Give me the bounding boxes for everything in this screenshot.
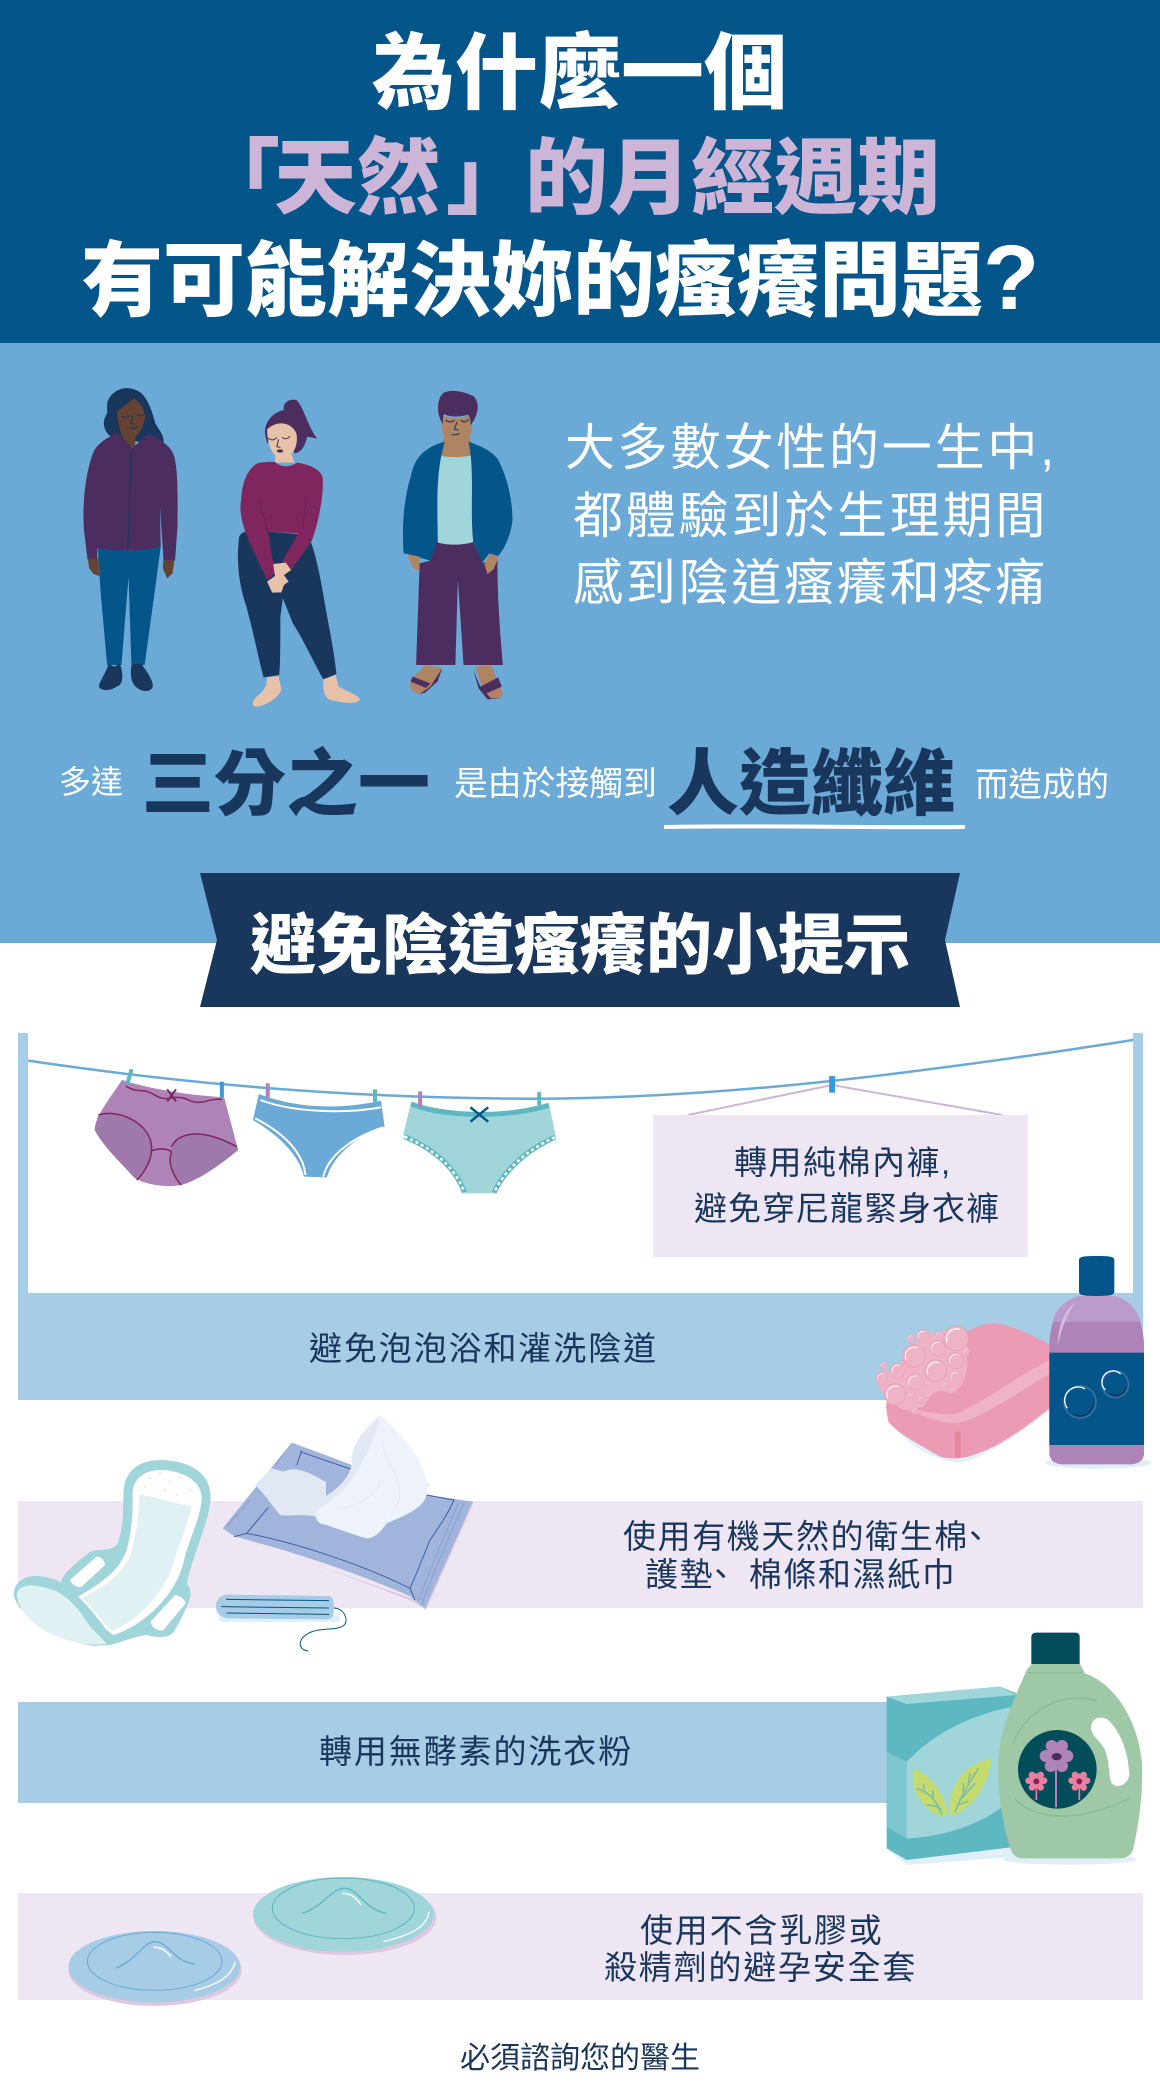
statistic line: 而造成的 [975, 767, 1109, 804]
tip 3 text: 使用有機天然的衛生棉、 [623, 1518, 994, 1555]
icon: wipes packet [223, 1415, 474, 1610]
tip 1 sign: 避免穿尼龍緊身衣褲 [694, 1190, 1000, 1227]
statistic line: 是由於接觸到 [454, 765, 657, 803]
footer note: 必須諮詢您的醫生 [460, 2042, 700, 2075]
tip 3 text: 護墊、 棉條和濕紙巾 [645, 1556, 956, 1593]
banner: tips heading [200, 873, 960, 1007]
title [81, 27, 1039, 329]
intro panel [0, 343, 1160, 943]
tip 5 band [18, 1893, 1143, 2000]
tip 2 band [18, 1293, 1143, 1400]
icon: purple wash bottle [1045, 1256, 1152, 1469]
intro statement: 感到陰道瘙癢和疼痛 [573, 555, 1048, 611]
title: 的月經週期 [525, 132, 940, 225]
intro statement: 大多數女性的一生中, [565, 420, 1057, 476]
tip 1 sign [653, 1115, 1028, 1257]
tip 4 band [18, 1702, 898, 1803]
icon: blue underwear [253, 1094, 385, 1177]
title: 」 [446, 132, 529, 225]
icon: condom blue [68, 1931, 242, 2006]
clothesline posts [18, 1033, 1143, 1300]
tip 5 text: 使用不含乳膠或 [640, 1912, 884, 1949]
header panel [0, 0, 1160, 343]
icon: detergent bottle [998, 1633, 1142, 1865]
intro statement [565, 420, 1057, 611]
title: 「 [197, 132, 280, 225]
person: man in cardigan [403, 391, 512, 699]
banner: tips heading: 避免陰道瘙癢的小提示 [250, 908, 910, 982]
icon: soap with bubbles [876, 1323, 1057, 1463]
title: 天然 [274, 132, 440, 225]
icon: condom teal [253, 1877, 436, 1955]
tip 3 band [18, 1501, 1143, 1608]
tip 3 text [623, 1518, 994, 1593]
clothes pegs [127, 1069, 539, 1107]
statistic line: 多達 [59, 764, 123, 800]
tip 4 text: 轉用無酵素的洗衣粉 [319, 1733, 633, 1770]
statistic line: 人造纖維 [667, 745, 955, 825]
statistic line: 三分之一 [142, 745, 430, 825]
clothesline rope and underwear [28, 1040, 1133, 1193]
tip 2 text: 避免泡泡浴和灌洗陰道 [309, 1330, 658, 1367]
tip 1 sign: 轉用純棉內褲, [734, 1144, 952, 1181]
person: woman with long hair [83, 388, 178, 691]
intro statement: 都體驗到於生理期間 [573, 488, 1048, 544]
tip 5 text [604, 1912, 917, 1986]
icon: tampon [216, 1595, 346, 1651]
tip 5 text: 殺精劑的避孕安全套 [604, 1949, 917, 1986]
title: 為什麼一個 [372, 27, 787, 120]
icon: sanitary pad [14, 1460, 211, 1646]
icon: teal underwear [403, 1102, 556, 1193]
illustration: three people [83, 388, 512, 707]
title: 有可能解決妳的瘙癢問題? [81, 227, 1039, 329]
statistic line [59, 745, 1109, 827]
hanging sign strings [688, 1085, 1002, 1115]
icon: detergent box [887, 1687, 1017, 1865]
person: woman with ponytail holding herself [238, 400, 360, 707]
icon: purple underwear [95, 1080, 238, 1186]
